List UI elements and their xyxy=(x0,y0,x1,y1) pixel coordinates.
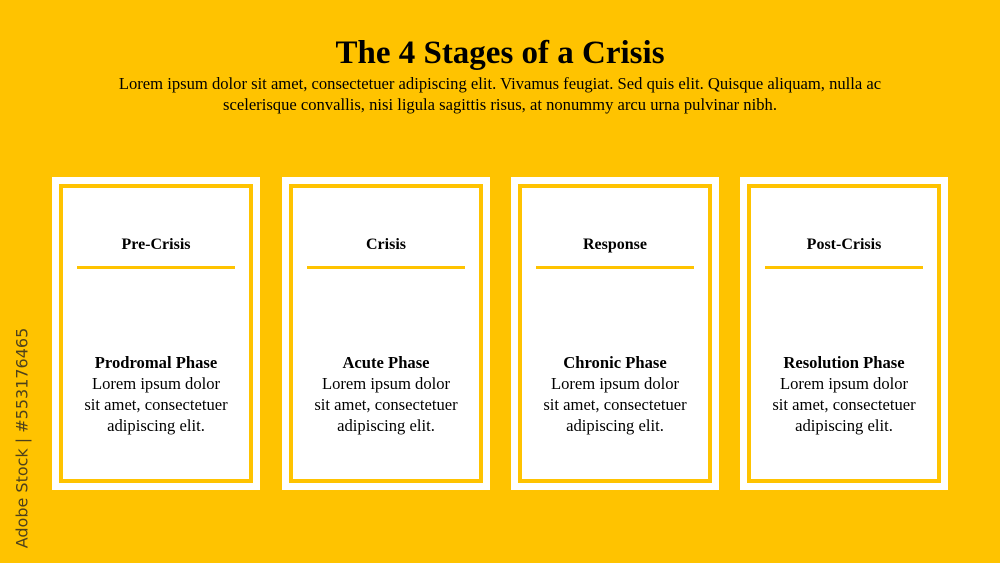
text block: chronic phase: sit amet, consectetuer xyxy=(543,395,687,414)
text block: prodromal phase: Lorem ipsum dolor xyxy=(92,374,220,393)
panel: post-crisis xyxy=(740,177,948,490)
underline xyxy=(77,266,235,269)
text block: prodromal phase xyxy=(84,353,228,435)
text block: chronic phase: Chronic Phase xyxy=(563,353,667,372)
text block: resolution phase: sit amet, consectetuer xyxy=(772,395,916,414)
text block: resolution phase: adipiscing elit. xyxy=(795,416,893,435)
text block: prodromal phase: adipiscing elit. xyxy=(107,416,205,435)
subtitle text: Lorem ipsum dolor sit amet, consectetuer adipiscing elit. Vivamus feugiat. Sed quis elit. Quisque aliquam, nulla ac scelerisque convallis, nisi ligula sagittis risus, at nonummy arcu urna pulvinar nibh. xyxy=(119,74,881,114)
text block: acute phase: sit amet, consectetuer xyxy=(314,395,458,414)
text block: acute phase: Acute Phase xyxy=(342,353,430,372)
panel: response xyxy=(511,177,719,490)
panel: pre-crisis xyxy=(52,177,260,490)
text block: prodromal phase: Prodromal Phase xyxy=(95,353,217,372)
text block: chronic phase: Lorem ipsum dolor xyxy=(551,374,679,393)
heading: response: Response xyxy=(583,236,647,253)
text block: resolution phase xyxy=(772,353,916,435)
text block: acute phase: Lorem ipsum dolor xyxy=(322,374,450,393)
underline xyxy=(307,266,465,269)
text block: resolution phase: Resolution Phase xyxy=(783,353,905,372)
text block: prodromal phase: sit amet, consectetuer xyxy=(84,395,228,414)
text block: chronic phase: adipiscing elit. xyxy=(566,416,664,435)
text block: chronic phase xyxy=(543,353,687,435)
watermark text: Adobe Stock | #553176465 xyxy=(12,328,32,548)
heading: pre-crisis: Pre-Crisis xyxy=(121,236,190,253)
text block: resolution phase: Lorem ipsum dolor xyxy=(780,374,908,393)
text block: acute phase: adipiscing elit. xyxy=(337,416,435,435)
underline xyxy=(765,266,923,269)
panel: crisis xyxy=(282,177,490,490)
text block: acute phase xyxy=(314,353,458,435)
heading: crisis: Crisis xyxy=(366,236,406,253)
heading: post-crisis: Post-Crisis xyxy=(807,236,881,253)
underline xyxy=(536,266,694,269)
title: The 4 Stages of a Crisis xyxy=(335,35,665,71)
